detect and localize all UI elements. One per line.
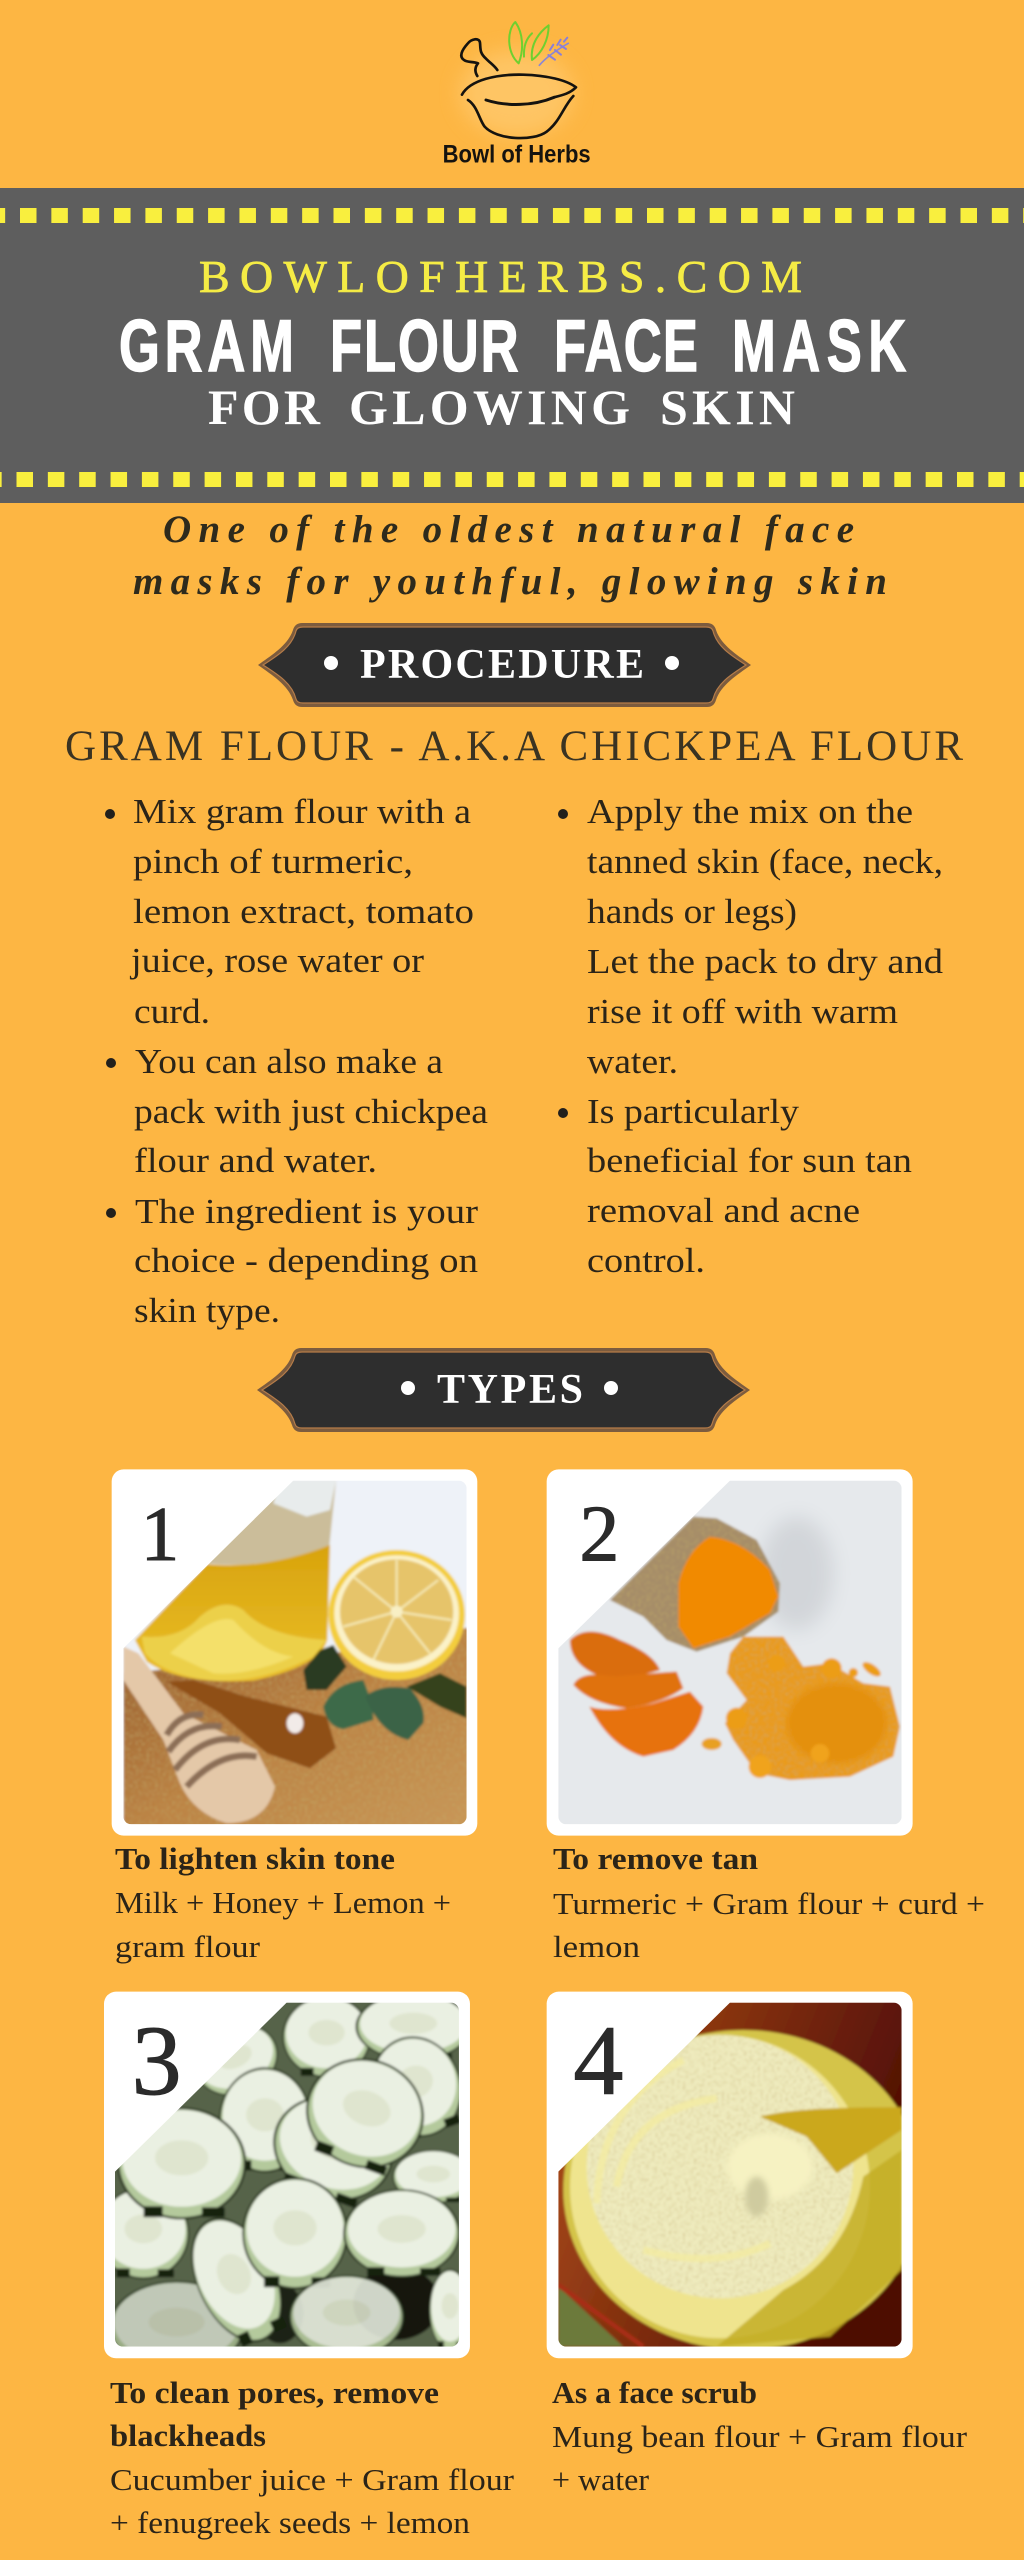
caption 1: gram flour	[115, 1929, 261, 1964]
caption 1	[115, 1841, 451, 1964]
tagline: One of the oldest natural face	[163, 508, 854, 551]
caption 3: blackheads	[110, 2418, 266, 2453]
main title: FLOUR	[330, 306, 519, 387]
caption 3	[110, 2375, 515, 2540]
procedure list right: Is particularly	[587, 1092, 800, 1131]
procedure list right: tanned skin (face, neck,	[587, 842, 943, 881]
caption 4: Mung bean flour + Gram flour	[552, 2419, 968, 2454]
procedure list right: control.	[587, 1241, 705, 1280]
site name: BOWLOFHERBS.COM	[199, 251, 802, 302]
subtitle: GLOWING	[349, 379, 630, 435]
number 3: 3	[132, 2005, 182, 2116]
main title: FACE	[554, 306, 698, 387]
caption 3: + fenugreek seeds + lemon	[110, 2505, 471, 2540]
main title	[119, 306, 906, 387]
number 1: 1	[141, 1491, 179, 1577]
caption 3: To clean pores, remove	[110, 2375, 439, 2410]
heading: types: TYPES	[437, 1367, 583, 1413]
main title: GRAM	[119, 306, 294, 387]
caption 1: To lighten skin tone	[115, 1841, 395, 1876]
procedure list left: curd.	[134, 992, 210, 1031]
procedure list right	[558, 792, 944, 1280]
header band	[0, 188, 1024, 503]
number 4: 4	[573, 2005, 623, 2116]
logo: Bowl of Herbs	[443, 22, 591, 169]
heading: procedure: PROCEDURE	[360, 642, 644, 688]
caption 4	[552, 2375, 968, 2497]
section heading: gram flour: GRAM FLOUR - A.K.A CHICKPEA FLOUR	[65, 723, 963, 770]
caption 3: Cucumber juice + Gram flour	[110, 2462, 515, 2497]
heading: procedure	[258, 623, 751, 707]
procedure list right: beneficial for sun tan	[587, 1141, 912, 1180]
card 4: flour bowl	[547, 1992, 923, 2358]
procedure list left: flour and water.	[134, 1141, 377, 1180]
subtitle	[208, 379, 795, 435]
procedure list right: removal and acne	[587, 1191, 860, 1230]
procedure list right: Let the pack to dry and	[587, 942, 944, 981]
photo: turmeric root and powder	[550, 1473, 910, 1833]
procedure list left: Mix gram flour with a	[133, 792, 471, 831]
caption 1: Milk + Honey + Lemon +	[115, 1885, 451, 1920]
procedure list right: hands or legs)	[587, 892, 797, 931]
caption 4: As a face scrub	[552, 2375, 757, 2410]
number 2: 2	[579, 1491, 619, 1579]
procedure list left: pack with just chickpea	[134, 1092, 488, 1131]
card 2: turmeric	[547, 1469, 913, 1836]
heading: types	[257, 1348, 750, 1432]
main title: MASK	[732, 306, 906, 387]
subtitle: FOR	[208, 379, 321, 435]
procedure list right: Apply the mix on the	[587, 792, 913, 831]
subtitle: SKIN	[660, 379, 795, 435]
card 3: cucumber	[98, 1992, 474, 2372]
procedure list left: The ingredient is your	[135, 1192, 478, 1231]
tagline	[133, 508, 887, 603]
caption 2: To remove tan	[553, 1841, 758, 1876]
logo: Bowl of Herbs: Bowl of Herbs	[443, 141, 591, 169]
photo: honey, lemon, dipper	[124, 1480, 467, 1824]
procedure list left: skin type.	[134, 1291, 280, 1330]
caption 2: lemon	[553, 1929, 641, 1964]
procedure list left: choice - depending on	[134, 1241, 478, 1280]
procedure list left: You can also make a	[135, 1042, 443, 1081]
procedure list left	[105, 792, 488, 1330]
caption 4: + water	[552, 2462, 650, 2497]
procedure list left: lemon extract, tomato	[133, 892, 474, 931]
caption 2	[553, 1841, 985, 1964]
procedure list right: rise it off with warm	[587, 992, 898, 1031]
caption 2: Turmeric + Gram flour + curd +	[553, 1886, 985, 1921]
procedure list left: juice, rose water or	[129, 941, 424, 980]
procedure list right: water.	[587, 1042, 678, 1081]
photo: flour in bowl with spoon	[558, 2002, 902, 2347]
photo: cucumber slices	[115, 2002, 459, 2347]
card 1: honey and lemon	[112, 1469, 480, 1840]
tagline: masks for youthful, glowing skin	[133, 560, 887, 603]
procedure list left: pinch of turmeric,	[133, 842, 413, 881]
